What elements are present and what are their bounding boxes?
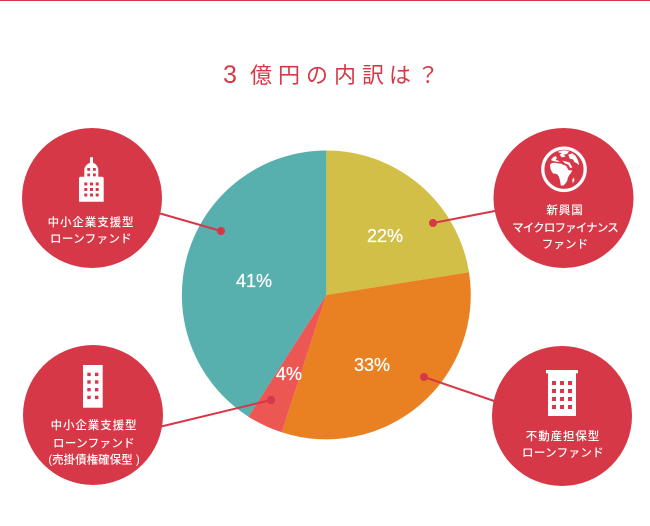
label text: マイクロファイナンス xyxy=(512,222,618,234)
label text: ファンド xyxy=(542,239,588,251)
connector: top right xyxy=(429,210,500,227)
icon: apartment building xyxy=(546,370,578,416)
label: 41%: 41% xyxy=(236,271,272,291)
label text: (売掛債権確保型 ) xyxy=(48,452,140,466)
connector: bottom right xyxy=(420,373,500,403)
icon: tall building xyxy=(79,157,104,202)
panel: real estate loan fund xyxy=(492,346,632,486)
label text: 新興国 xyxy=(546,203,584,217)
label text: 中小企業支援型 xyxy=(48,215,134,229)
panel: SME loan fund, receivables xyxy=(23,345,163,485)
label: 22%: 22% xyxy=(367,226,403,246)
label text: ローンファンド xyxy=(53,438,135,450)
label: 33%: 33% xyxy=(354,355,390,375)
connector: top left xyxy=(155,212,225,235)
slice: 41% xyxy=(182,150,326,417)
title: 億円の内訳は？ xyxy=(250,63,439,88)
icon: office block xyxy=(83,365,103,408)
slice: 22% xyxy=(326,150,469,295)
slice: 4% xyxy=(248,295,326,432)
pie chart xyxy=(182,150,471,439)
slice: 33% xyxy=(282,272,471,439)
label text: 不動産担保型 xyxy=(526,429,600,443)
panel: emerging microfinance fund xyxy=(494,128,634,268)
label: 4%: 4% xyxy=(276,364,302,384)
connector: bottom left xyxy=(155,396,275,428)
label text: 中小企業支援型 xyxy=(51,418,137,432)
label text: ローンファンド xyxy=(50,234,132,246)
panel: SME loan fund xyxy=(22,128,162,268)
title: 3 xyxy=(223,61,237,89)
label text: ローンファンド xyxy=(522,448,604,460)
icon: globe xyxy=(543,148,585,190)
